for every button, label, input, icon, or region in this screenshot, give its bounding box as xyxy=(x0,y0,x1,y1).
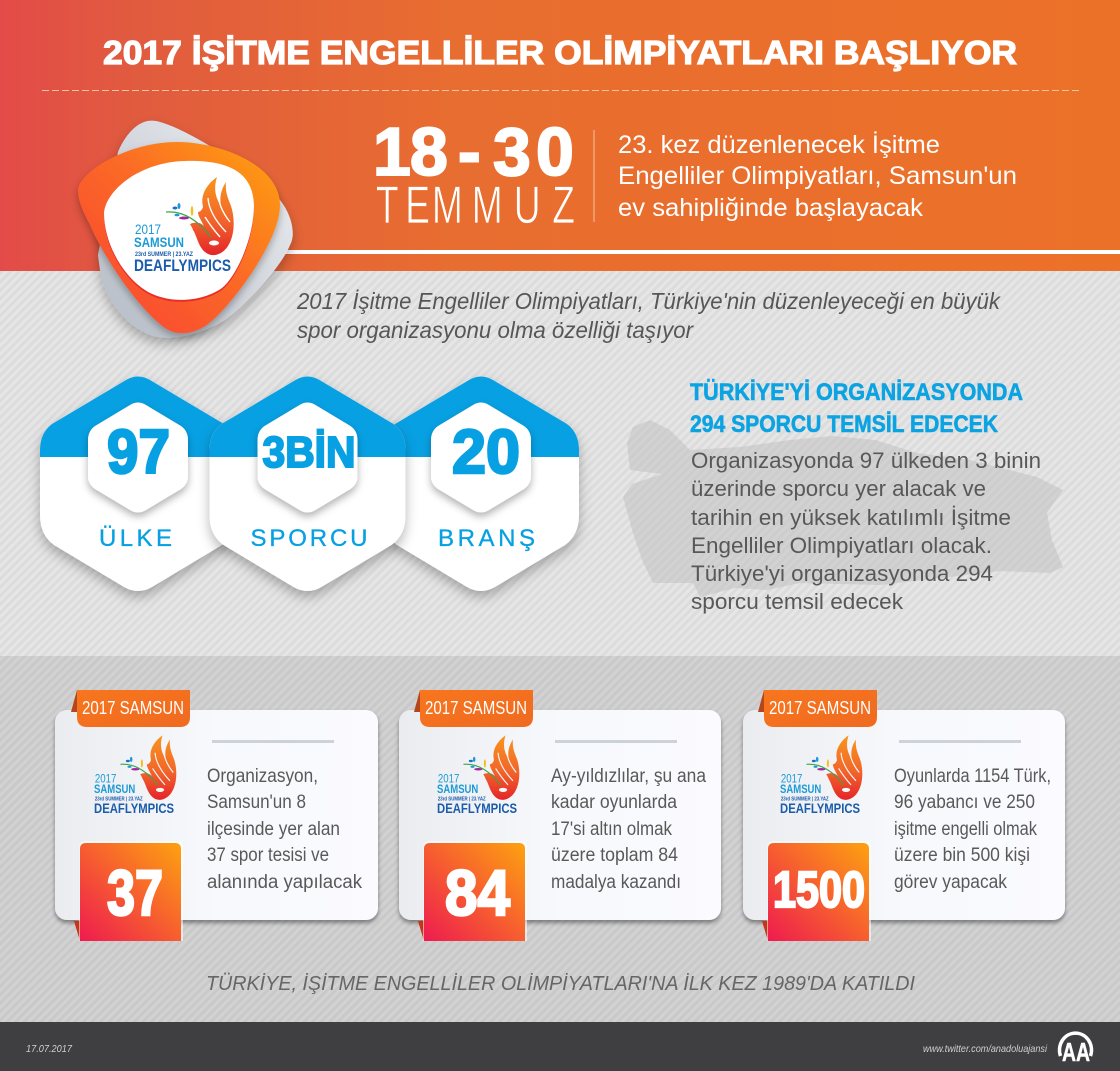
card text xyxy=(894,766,1051,893)
card text: ilçesinde yer alan xyxy=(207,819,340,840)
header description xyxy=(618,130,1017,222)
small logo: DEAFLYMPICS xyxy=(437,800,517,816)
logo: wordmark: SAMSUN xyxy=(134,234,184,250)
logo: wordmark: 2017 xyxy=(135,221,161,237)
date range: 18 - 30 xyxy=(373,114,574,190)
card 3 xyxy=(743,690,1065,941)
small logo: 2017 xyxy=(781,773,802,785)
background upper section xyxy=(0,271,1120,656)
number box: 84 xyxy=(445,857,510,929)
card text: Organizasyon, xyxy=(207,766,318,787)
card text: 37 spor tesisi ve xyxy=(207,845,329,866)
body paragraph: sporcu temsil edecek xyxy=(691,589,904,614)
logo: flame xyxy=(166,177,234,255)
body paragraph: tarihin en yüksek katılımlı İşitme xyxy=(691,505,1011,530)
tag: 2017 SAMSUN xyxy=(425,697,527,718)
small logo xyxy=(780,735,862,816)
footer bar xyxy=(0,1022,1120,1071)
stat hexagon: 20 branches: 20 xyxy=(452,418,520,487)
number box xyxy=(74,841,183,941)
small logo: DEAFLYMPICS xyxy=(780,800,860,816)
card 1 xyxy=(55,690,378,941)
badge orange shape xyxy=(78,142,280,333)
month: TEMMUZ xyxy=(376,175,575,235)
intro sentence: spor organizasyonu olma özelliği taşıyor xyxy=(297,317,694,343)
stat hexagon: 20 branches: BRANŞ xyxy=(438,525,535,552)
body paragraph xyxy=(691,448,1041,614)
date: 17.07.2017 xyxy=(26,1044,72,1055)
small logo: DEAFLYMPICS xyxy=(94,800,174,816)
blue heading: 294 SPORCU TEMSİL EDECEK xyxy=(690,411,999,438)
header band xyxy=(0,0,1120,271)
small logo: SAMSUN xyxy=(780,784,821,796)
small logo: 2017 xyxy=(438,773,459,785)
logo: wordmark: DEAFLYMPICS xyxy=(134,256,231,275)
card text: 96 yabancı ve 250 xyxy=(894,792,1035,813)
number box xyxy=(418,841,527,941)
number box xyxy=(762,841,871,941)
body paragraph: Türkiye'yi organizasyonda 294 xyxy=(691,561,993,586)
card text: 17'si altın olmak xyxy=(551,819,672,840)
card text xyxy=(551,766,706,893)
card text: madalya kazandı xyxy=(551,872,681,893)
small logo: 23rd SUMMER | 23.YAZ xyxy=(438,797,486,803)
card text: Samsun'un 8 xyxy=(207,792,306,813)
card text: alanında yapılacak xyxy=(207,872,362,893)
icon: Anadolu Agency logo xyxy=(1060,1033,1092,1067)
body paragraph: Organizasyonda 97 ülkeden 3 binin xyxy=(691,448,1041,473)
stat hexagon: 3 thousand athletes xyxy=(210,376,406,591)
card text: Ay-yıldızlılar, şu ana xyxy=(551,766,706,787)
badge white centre xyxy=(104,161,254,300)
small logo xyxy=(94,735,176,816)
card text: görev yapacak xyxy=(894,872,1007,893)
tag xyxy=(71,690,190,727)
intro sentence xyxy=(296,288,1001,343)
stat hexagon: 3 thousand athletes: 3BİN xyxy=(262,428,356,477)
body paragraph: Engelliler Olimpiyatları olacak. xyxy=(691,533,992,558)
header description: 23. kez düzenlenecek İşitme xyxy=(618,130,940,159)
twitter address: www.twitter.com/anadoluajansi xyxy=(923,1043,1048,1055)
small logo: 2017 xyxy=(95,773,116,785)
header description: Engelliler Olimpiyatları, Samsun'un xyxy=(618,162,1017,190)
number box: 37 xyxy=(107,857,163,929)
card text: Oyunlarda 1154 Türk, xyxy=(894,766,1051,787)
body paragraph: üzerinde sporcu yer alacak ve xyxy=(691,476,986,501)
tag xyxy=(758,690,877,727)
card body xyxy=(399,710,721,920)
map of Turkey xyxy=(623,420,1063,597)
main logo badge xyxy=(78,121,293,338)
small logo: SAMSUN xyxy=(94,784,135,796)
header description: ev sahipliğinde başlayacak xyxy=(618,194,924,222)
title: 2017 İŞİTME ENGELLİLER OLİMPİYATLARI BAŞLIYOR xyxy=(103,34,1017,71)
card body xyxy=(55,710,378,920)
card 2 xyxy=(399,690,721,941)
background lower section xyxy=(0,656,1120,1022)
card text xyxy=(207,766,362,893)
card text: üzere toplam 84 xyxy=(551,845,678,866)
intro sentence: 2017 İşitme Engelliler Olimpiyatları, Türkiye'nin düzenleyeceği en büyük xyxy=(296,288,1001,314)
small logo: 23rd SUMMER | 23.YAZ xyxy=(781,797,829,803)
blue heading: TÜRKİYE'Yİ ORGANİZASYONDA xyxy=(690,379,1023,406)
tag: 2017 SAMSUN xyxy=(82,697,184,718)
stat hexagon: 97 countries xyxy=(40,376,236,591)
stat hexagon: 20 branches xyxy=(383,376,579,591)
stat hexagon: 97 countries: ÜLKE xyxy=(99,525,172,552)
card text: işitme engelli olmak xyxy=(894,819,1037,840)
small logo: 23rd SUMMER | 23.YAZ xyxy=(95,797,143,803)
blue heading xyxy=(690,379,1023,438)
icon: Anadolu Agency logo: AA xyxy=(1062,1037,1090,1067)
card text: kadar oyunlarda xyxy=(551,792,677,813)
stat hexagon: 97 countries: 97 xyxy=(107,418,170,487)
number box: 1500 xyxy=(773,861,865,918)
tag xyxy=(414,690,533,727)
logo: wordmark xyxy=(134,221,231,275)
tag: 2017 SAMSUN xyxy=(769,697,871,718)
card text: üzere bin 500 kişi xyxy=(894,845,1030,866)
logo: wordmark: 23rd SUMMER | 23.YAZ xyxy=(135,251,193,258)
stat hexagon: 3 thousand athletes: SPORCU xyxy=(250,525,368,552)
date block xyxy=(373,114,575,235)
badge back shape xyxy=(98,121,293,338)
card body xyxy=(743,710,1065,920)
small logo: SAMSUN xyxy=(437,784,478,796)
closing note: TÜRKİYE, İŞİTME ENGELLİLER OLİMPİYATLARI'NA İLK KEZ 1989'DA KATILDI xyxy=(206,973,915,995)
small logo xyxy=(437,735,519,816)
